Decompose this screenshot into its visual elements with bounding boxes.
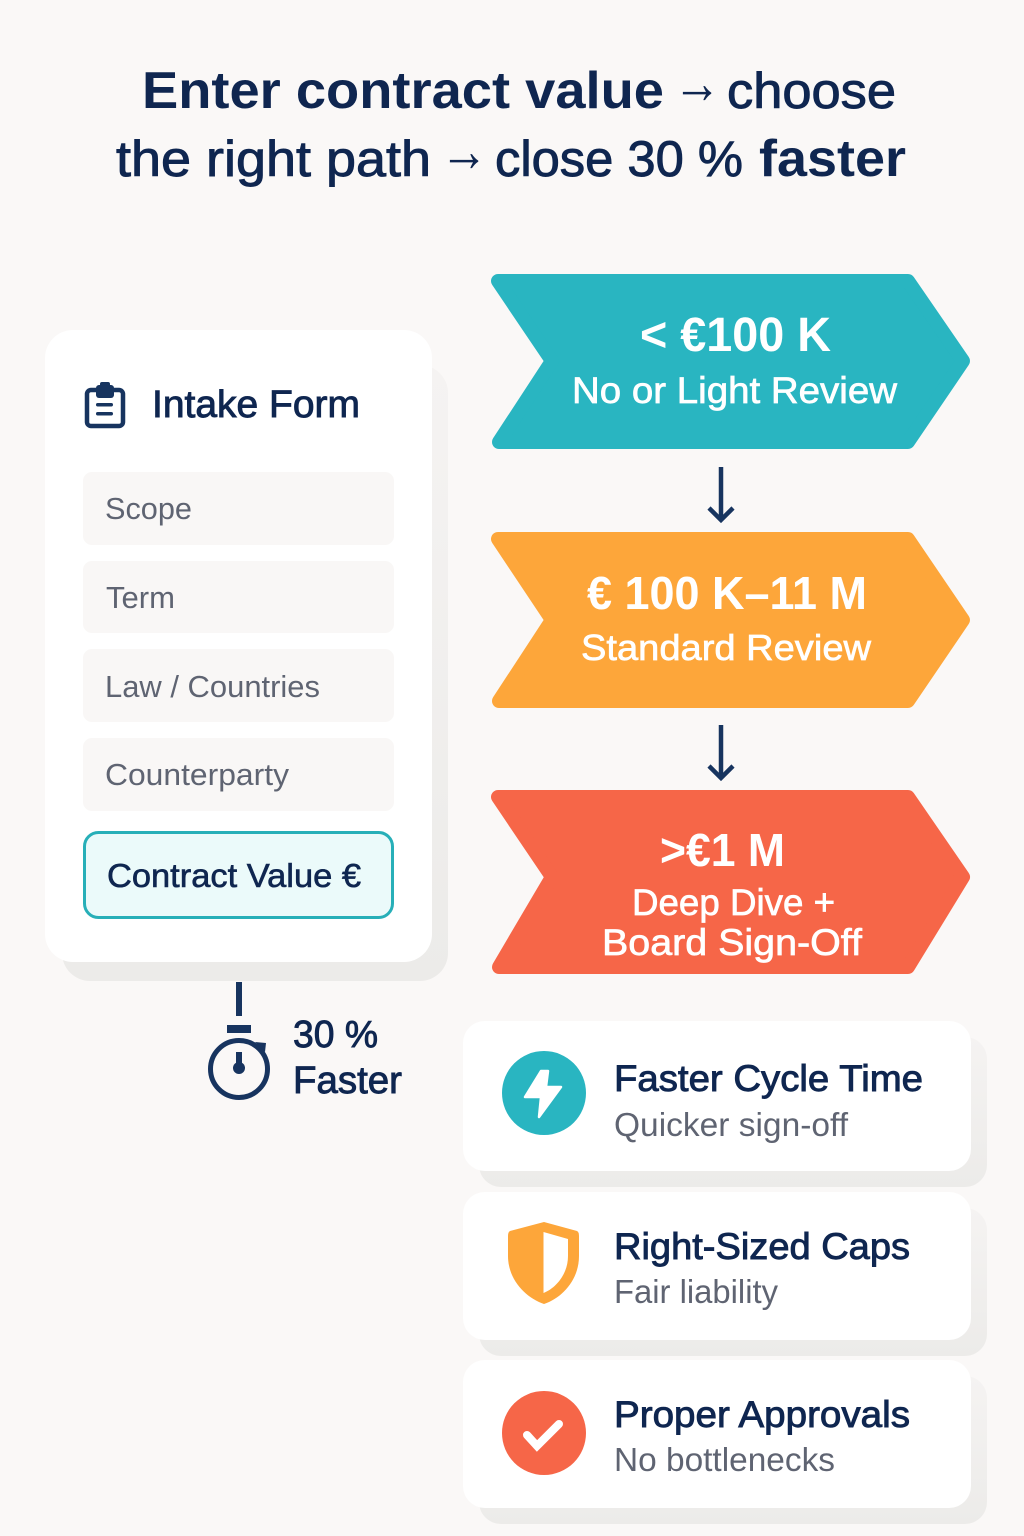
field: term <box>83 561 394 633</box>
chevron: 100K to 1M: Standard Review <box>581 627 872 668</box>
field: counterparty: Counterparty <box>105 757 289 792</box>
icon: shield <box>508 1222 579 1304</box>
chevron: 100K to 1M: € 100 K–11 M <box>587 567 867 619</box>
panel: faster cycle time: Faster Cycle Time <box>614 1058 923 1099</box>
panel: right-sized caps: Right-Sized Caps <box>614 1226 910 1267</box>
title <box>116 49 906 188</box>
icon: check mark <box>502 1391 586 1475</box>
field: term: Term <box>106 580 175 615</box>
panel: proper approvals: No bottlenecks <box>614 1441 835 1478</box>
panel: proper approvals: Proper Approvals <box>614 1394 910 1435</box>
field: contract value highlighted: Contract Value € <box>107 857 361 894</box>
chevron: 100K to 1M <box>498 539 963 701</box>
chevron: over 1M: >€1 M <box>660 824 785 876</box>
title: → <box>673 49 721 116</box>
chevron: under 100K: < €100 K <box>640 309 831 362</box>
title: Enter contract value <box>142 62 664 120</box>
title: close 30 % <box>495 131 743 187</box>
panel: right-sized caps <box>463 1192 987 1356</box>
field: contract value highlighted <box>84 832 392 918</box>
form heading: Intake Form <box>152 384 360 426</box>
panel: right-sized caps: Fair liability <box>614 1273 778 1310</box>
label: 30 percent faster <box>293 1014 402 1102</box>
chevron: under 100K <box>498 281 963 442</box>
label: 30 percent faster: Faster <box>293 1060 402 1102</box>
chevron: under 100K: No or Light Review <box>572 370 897 411</box>
field: counterparty <box>83 738 394 811</box>
chevron: over 1M <box>498 797 963 967</box>
panel: intake form <box>45 330 448 981</box>
panel: proper approvals <box>463 1360 987 1524</box>
icon: stopwatch with connector <box>210 982 268 1098</box>
chevron: over 1M: Deep Dive + <box>632 882 835 923</box>
panel: faster cycle time: Quicker sign-off <box>614 1106 849 1143</box>
icon: clipboard <box>87 382 123 426</box>
label: 30 percent faster: 30 % <box>293 1014 378 1056</box>
chevron: over 1M: Board Sign-Off <box>602 922 863 963</box>
title: choose <box>727 63 896 119</box>
icon: lightning bolt <box>502 1051 586 1135</box>
title: faster <box>759 130 906 188</box>
panel: faster cycle time <box>463 1021 987 1187</box>
arrow: second to third <box>709 725 733 778</box>
field: scope: Scope <box>105 491 192 526</box>
title: the right path <box>116 131 431 187</box>
field: law and countries <box>83 649 394 722</box>
arrow: first to second <box>709 467 733 520</box>
field: law and countries: Law / Countries <box>105 669 320 704</box>
field: scope <box>83 472 394 545</box>
title: → <box>440 117 488 184</box>
